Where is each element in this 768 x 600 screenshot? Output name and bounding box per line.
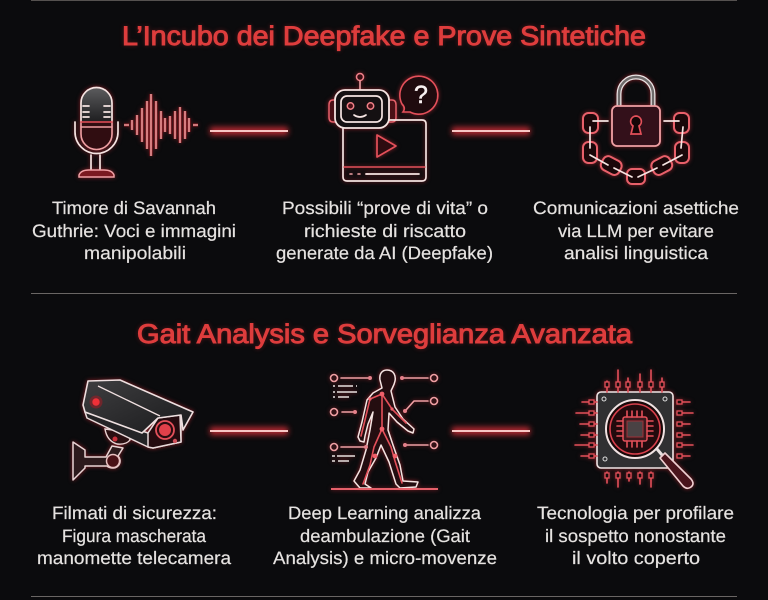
text: prove di vita: [276, 198, 493, 263]
text: comunicazioni: analisi linguistica: [564, 243, 709, 263]
text: filmati di sicurezza: Filmati di sicurezza:: [52, 503, 217, 523]
text: tecnologia: [537, 503, 734, 568]
text: savannah guthrie: manipolabili: [84, 243, 186, 263]
arrow: connector 1: [210, 127, 288, 135]
heading: gait analysis section: Gait Analysis e Sorveglianza Avanzata: [137, 319, 633, 349]
icon: padlock with chain: [583, 77, 689, 184]
icon: robot with video and question bubble: [329, 74, 438, 181]
text: comunicazioni: Comunicazioni asettiche: [533, 198, 739, 218]
text: savannah guthrie: Timore di Savannah: [52, 198, 216, 218]
text: tecnologia: Tecnologia per profilare: [537, 503, 734, 523]
text: filmati di sicurezza: [37, 503, 232, 568]
icon: microphone with waveform: [75, 88, 198, 177]
icon: security camera: [73, 380, 193, 480]
arrow: connector 2: [452, 127, 530, 135]
text: tecnologia: il sospetto nonostante: [545, 526, 726, 546]
icon: microchip under magnifying glass: [575, 370, 693, 488]
text: deep learning: [273, 503, 497, 568]
text: savannah guthrie: [32, 198, 236, 263]
text: deep learning: Deep Learning analizza: [288, 503, 482, 523]
text: deep learning: Analysis) e micro-movenze: [273, 548, 497, 568]
text: filmati di sicurezza: manomette telecamera: [37, 548, 232, 568]
icon: walking figure with gait analysis labels: [330, 370, 438, 489]
text: comunicazioni: [533, 198, 739, 263]
text: prove di vita: richieste di riscatto: [304, 221, 466, 241]
text: prove di vita: Possibili “prove di vita” o: [282, 198, 488, 218]
text: prove di vita: generate da AI (Deepfake): [276, 243, 493, 263]
text: deep learning: deambulazione (Gait: [300, 526, 470, 546]
icon: robot with video and question bubble: ?: [414, 81, 428, 109]
text: filmati di sicurezza: Figura mascherata: [62, 526, 207, 546]
arrow: connector 3: [210, 427, 288, 435]
text: tecnologia: il volto coperto: [572, 548, 700, 568]
text: savannah guthrie: Guthrie: Voci e immagini: [32, 221, 236, 241]
arrow: connector 4: [452, 427, 530, 435]
heading: deepfake section: L’Incubo dei Deepfake e Prove Sintetiche: [122, 21, 646, 51]
text: comunicazioni: via LLM per evitare: [558, 221, 714, 241]
